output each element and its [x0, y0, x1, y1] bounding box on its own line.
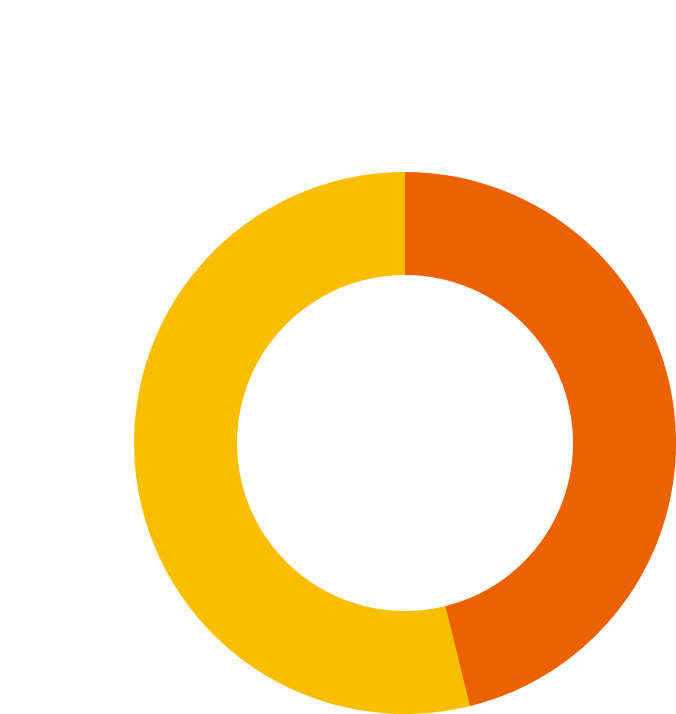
segment: orange [405, 172, 676, 706]
segment: yellow [134, 172, 470, 714]
